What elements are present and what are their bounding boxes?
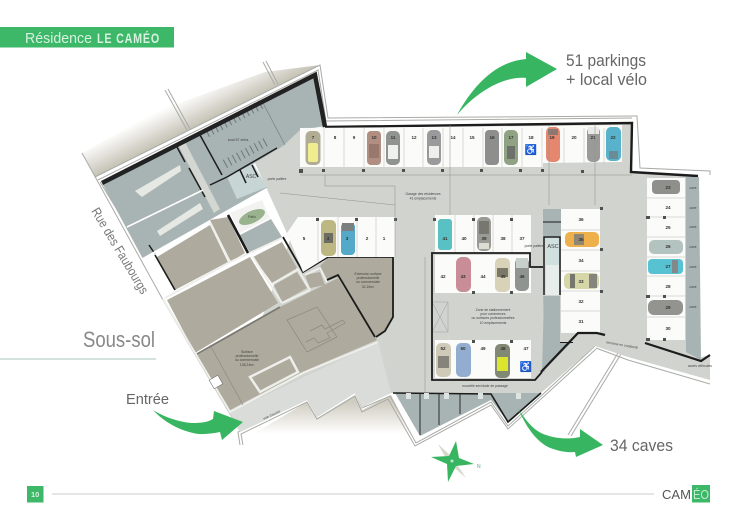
lower perimeter wall <box>541 333 710 372</box>
label: 34 caves: 34 caves <box>610 437 673 455</box>
lower bays: 47 <box>523 346 529 351</box>
main perimeter wall <box>325 123 698 176</box>
page number: 10 <box>31 490 39 499</box>
parked cars: 10 <box>371 135 377 140</box>
title banner: LE CAMÉO <box>97 31 160 46</box>
floor plan: accès véhicules <box>688 364 712 368</box>
right cellar strip: cave <box>689 245 697 249</box>
parking bays: far right column 23-30: 28 <box>665 284 671 289</box>
arrow: parkings <box>457 52 557 115</box>
logo: Caméo <box>662 485 710 502</box>
logo: Caméo: ÉO <box>693 487 709 502</box>
parked cars: 19 <box>549 135 555 140</box>
commercial surface rooms <box>157 217 393 410</box>
floor plan <box>82 61 712 446</box>
right cellar strip <box>686 177 701 360</box>
parking bays: middle row right: 38 <box>500 236 506 241</box>
parking bays: right column 31-36: 31 <box>578 319 584 324</box>
parked cars: 16 <box>489 135 495 140</box>
upper bays: 42 <box>440 274 446 279</box>
commercial surface label: Surface <box>241 350 253 354</box>
ground shadows <box>82 65 440 445</box>
extension label: professionnelle <box>357 276 380 280</box>
bay numbers: 12 <box>411 135 417 140</box>
parking bays: right column 31-36: 33 <box>578 279 584 284</box>
interior stair outline <box>210 307 345 405</box>
courtyard room with planter <box>230 200 282 253</box>
bay numbers: 14 <box>450 135 456 140</box>
outer boundary lines <box>82 61 710 446</box>
parking bays: middle row left <box>287 217 395 272</box>
extension label: 32,16m² <box>362 285 375 289</box>
zone label: Zone de stationnement <box>476 308 510 312</box>
ramp crossing <box>432 302 448 332</box>
extension label <box>355 272 382 289</box>
network lines <box>280 125 632 392</box>
label: 51 parkings + local vélo <box>566 52 647 89</box>
parked cars: 11 <box>391 135 396 140</box>
parking bays: middle row left: 2 <box>366 236 369 241</box>
parking bays: far right column 23-30: 27 <box>665 264 671 269</box>
parked cars <box>306 127 621 165</box>
parking bays: middle row left: 5 <box>303 236 306 241</box>
stair core <box>250 357 298 392</box>
access ramp label: voie d'accès <box>262 409 281 421</box>
bike room label: local 57 vélos <box>228 138 249 142</box>
page number <box>27 486 44 502</box>
lift and stair core <box>525 209 572 372</box>
arrow: cellars <box>518 408 603 457</box>
cellar room <box>227 164 267 199</box>
bay numbers: 8 <box>334 135 337 140</box>
corridors <box>135 142 220 236</box>
parking bays: far right column 23-30: 23 <box>665 185 671 190</box>
commercial surface label <box>235 350 259 367</box>
cellars row <box>393 393 541 436</box>
bay numbers: 15 <box>469 135 475 140</box>
parking bays: far right column 23-30: 25 <box>665 225 671 230</box>
bike stalls <box>207 104 266 164</box>
parked cars: 7 <box>312 135 315 140</box>
parking bays: top row <box>300 125 622 167</box>
parking bays: far right column 23-30: 24 <box>665 205 671 210</box>
heading: Rue des Faubourgs: Rue des Faubourgs <box>88 205 152 297</box>
parking bays: far right column 23-30: 29 <box>665 305 671 310</box>
heading: Sous-sol: Sous-sol <box>83 327 155 352</box>
parking bays: middle row left: 3 <box>346 236 349 241</box>
parking bays: middle row right: 40 <box>461 236 467 241</box>
right cellar strip: cave <box>689 265 697 269</box>
lower bays: 49 <box>480 346 486 351</box>
logo: Caméo: CAM <box>662 488 691 502</box>
storage block: bike room and cellars: porte palière <box>268 177 287 181</box>
parking bays: middle row right: 37 <box>519 236 525 241</box>
bay numbers: 18 <box>528 135 534 140</box>
structural columns <box>299 169 666 343</box>
zone label <box>472 308 515 325</box>
footer <box>27 485 710 502</box>
right cellar strip: cave <box>689 186 697 190</box>
commercial walls <box>163 222 378 412</box>
label: Entrée: Entrée <box>126 391 169 408</box>
bay numbers: 9 <box>353 135 356 140</box>
arrow: entrance <box>153 410 243 440</box>
lift and stair core: ASC <box>547 244 559 250</box>
garage label: 41 emplacements <box>410 196 437 200</box>
right cellar strip: cave <box>689 305 697 309</box>
lift label: ASC <box>246 174 257 180</box>
title banner <box>0 27 174 48</box>
extension label: ou commerciale <box>356 280 380 284</box>
upper bays <box>435 255 531 293</box>
corridor labels: terrasse en surplomb <box>606 340 638 350</box>
lower bays <box>435 340 532 378</box>
parking bays: middle row right <box>435 215 531 253</box>
parking bays: far right column 23-30 <box>647 178 685 340</box>
parking bays: right column 31-36: 34 <box>578 258 584 263</box>
parking bays: middle row left: 1 <box>383 236 386 241</box>
lower bays: 52 <box>440 346 446 351</box>
label: 51 parkings + local vélo: 51 parkings <box>566 52 646 70</box>
upper bays: 46 <box>519 274 525 279</box>
perimeter wall top left <box>102 75 325 183</box>
title banner: Résidence <box>25 31 92 47</box>
lower left access ramp <box>230 342 391 432</box>
bay numbers: 20 <box>571 135 577 140</box>
parking bays: right column 31-36: 35 <box>578 237 584 242</box>
parked cars: 21 <box>590 135 596 140</box>
icon: compass: N <box>477 464 481 470</box>
lower bays: 48 <box>500 346 506 351</box>
lower bays: ♿ <box>520 360 532 373</box>
upper bays: 43 <box>460 274 466 279</box>
parked cars: 17 <box>508 135 514 140</box>
right cellar strip: cave <box>689 285 697 289</box>
garage label: Garage des résidences <box>405 192 441 196</box>
courtyard room with planter: Patio <box>248 215 256 219</box>
lift and stair core: porte palière <box>525 244 544 248</box>
upper bays: 44 <box>480 274 486 279</box>
parking bays: right column 31-36 <box>561 209 600 333</box>
zone label: pour commerces <box>480 312 506 316</box>
passage label: nouvelle servitude de passage <box>462 384 508 388</box>
commercial surface label: ou commerciale <box>235 358 259 362</box>
bay numbers <box>334 135 577 140</box>
garage label <box>405 192 441 200</box>
white shaft <box>209 375 223 389</box>
garage floor <box>228 124 710 432</box>
parking bays: middle row right: 39 <box>481 236 487 241</box>
parking bays: middle row left: 4 <box>327 236 330 241</box>
right cellar strip: cave <box>689 225 697 229</box>
zone label: 10 emplacements <box>480 321 507 325</box>
right cellar strip: cave <box>689 206 697 210</box>
parking bays: far right column 23-30: 30 <box>665 326 671 331</box>
commercial parking enclosure <box>432 253 544 388</box>
parked cars: 13 <box>431 135 437 140</box>
icon: compass <box>431 441 481 482</box>
interior walls <box>149 135 277 254</box>
commercial surface label: professionnelle <box>236 354 259 358</box>
parked cars: 22 <box>610 135 616 140</box>
parking bays: middle row right: 41 <box>442 236 448 241</box>
extension label: Extension surface <box>355 272 382 276</box>
upper bays: 45 <box>500 274 506 279</box>
lower bays: 50 <box>460 346 466 351</box>
parking bays: right column 31-36: 32 <box>578 299 584 304</box>
label: 51 parkings + local vélo: + local vélo <box>566 71 647 89</box>
commercial surface label: 135,24m² <box>240 363 255 367</box>
storage block: bike room and cellars <box>102 75 325 259</box>
parking bays: far right column 23-30: 26 <box>665 244 671 249</box>
accessible bay symbol: ♿ <box>525 143 537 156</box>
zone label: ou surfaces professionnelles <box>472 316 515 320</box>
parking bays: right column 31-36: 36 <box>578 217 584 222</box>
